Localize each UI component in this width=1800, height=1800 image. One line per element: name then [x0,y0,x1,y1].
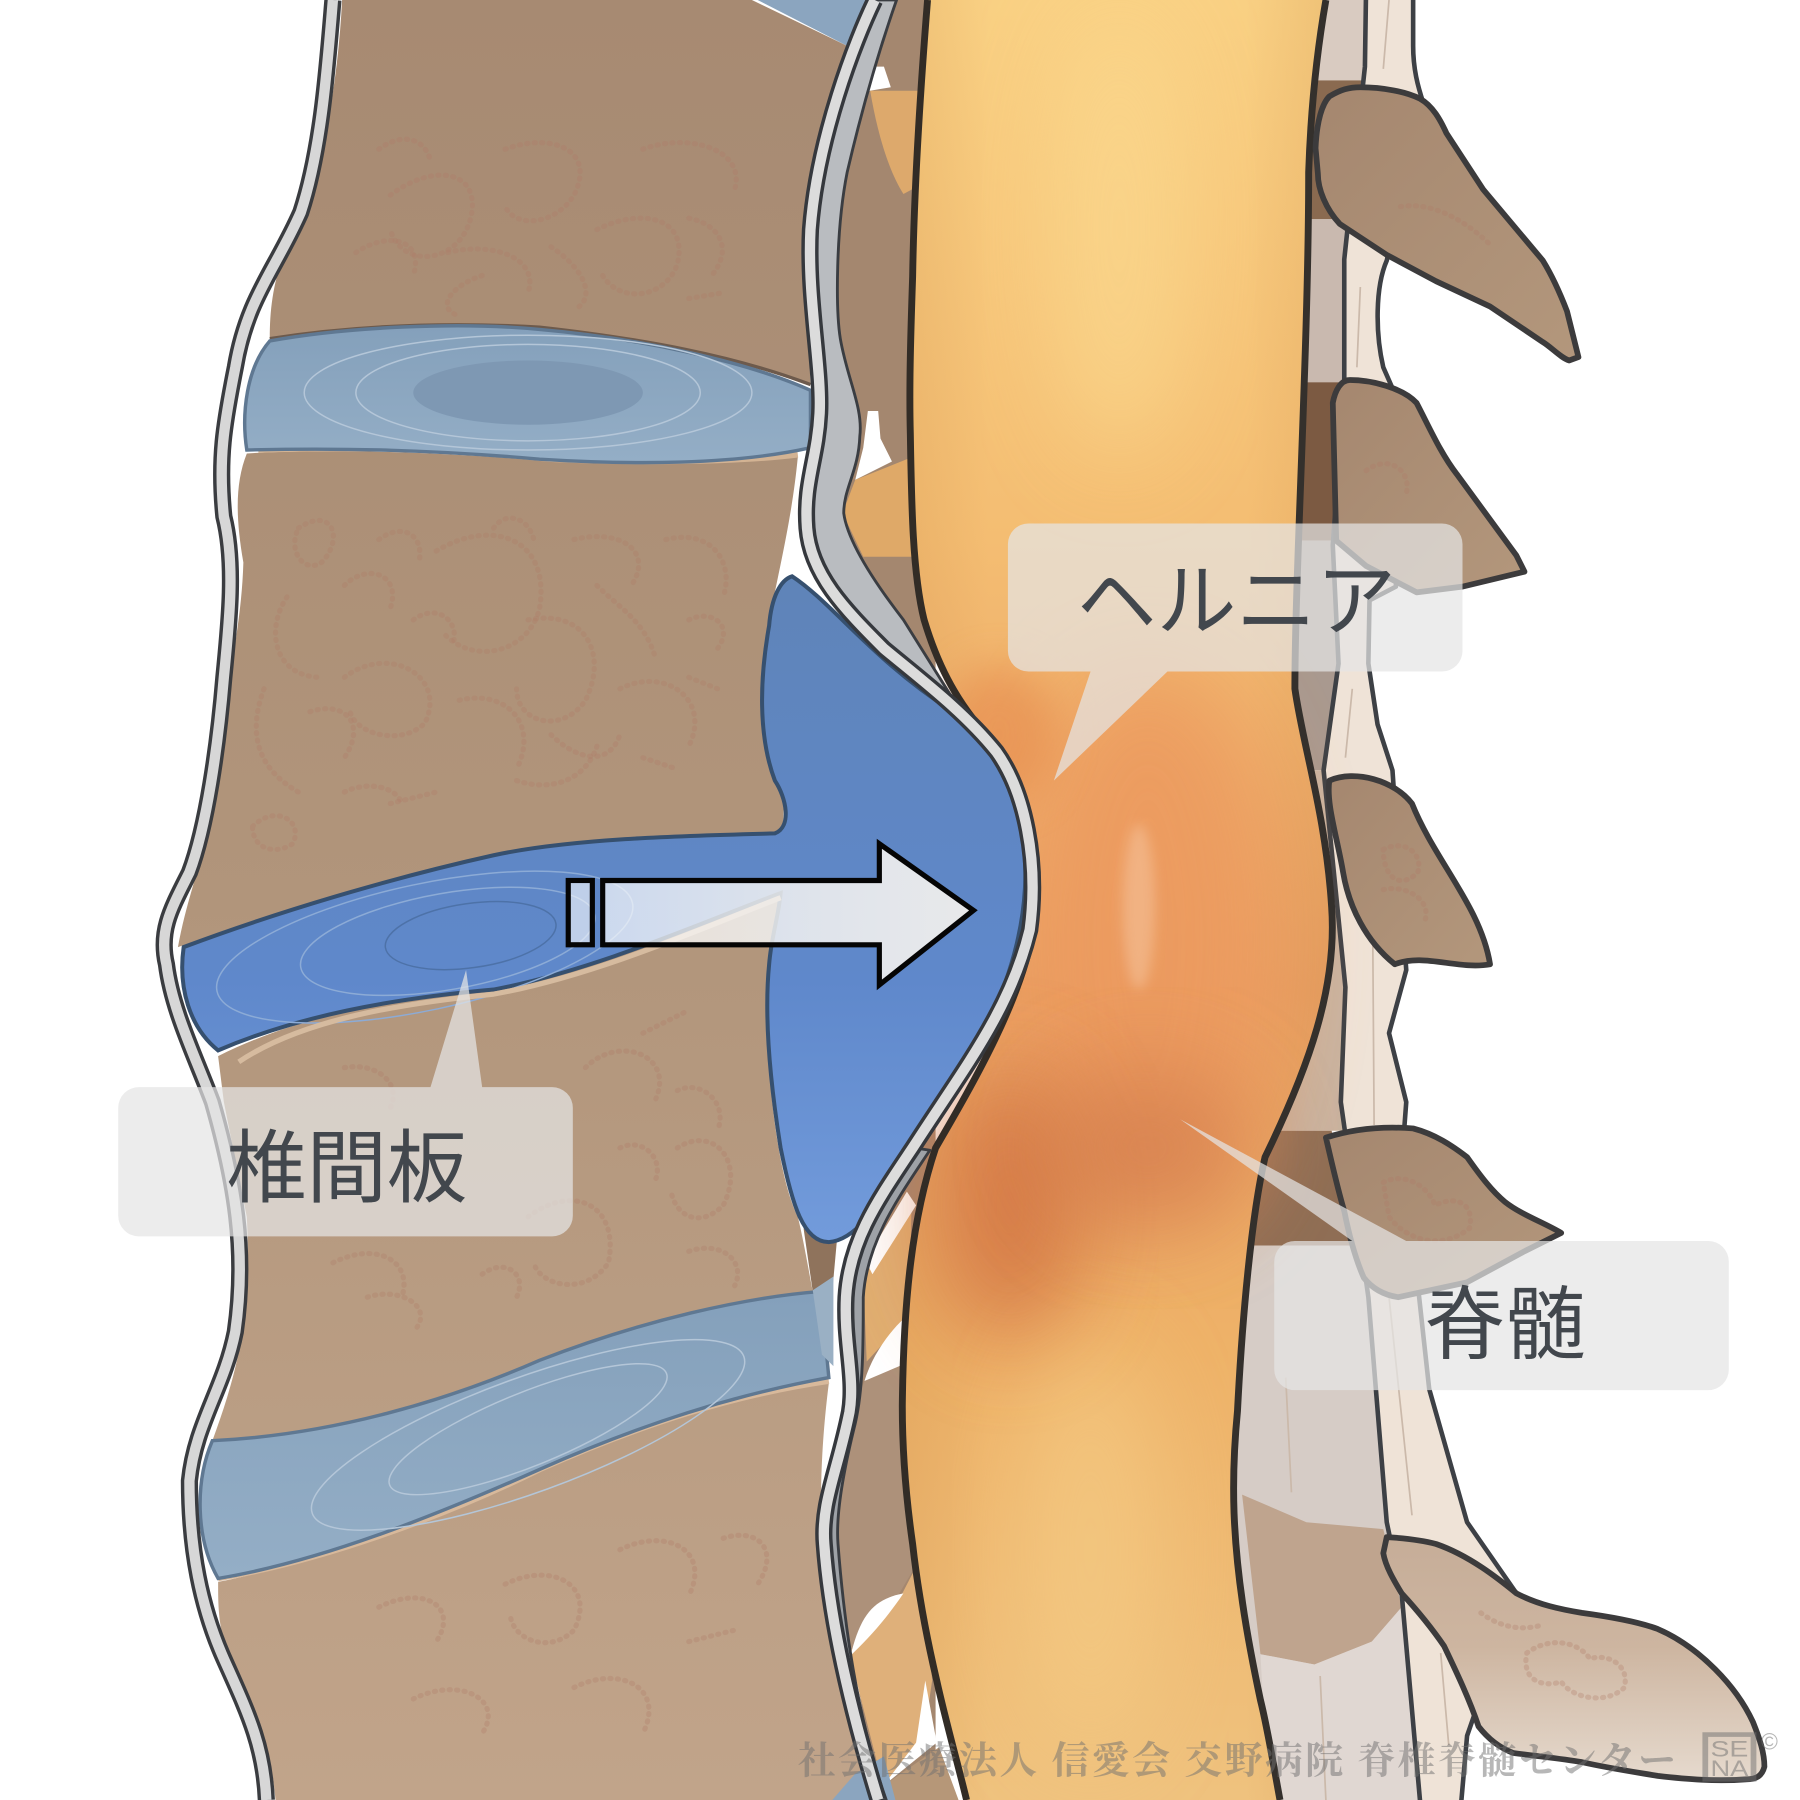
callout: spinal cord: 脊髄 [1425,1280,1585,1370]
callout: herniation [1008,523,1462,781]
callout: herniation: ヘルニア [1077,557,1396,647]
posterior longitudinal ligament [806,0,1033,1800]
vertebral bodies [178,0,884,1800]
logo: SENA mark [1702,1728,1778,1782]
watermark: hospital name: 社会医療法人 信愛会 交野病院 脊椎脊髄センター [798,1741,1676,1783]
anterior ligament [164,0,333,1800]
spinous processes [1316,87,1764,1780]
logo: SENA mark: SE [1710,1736,1748,1761]
logo: SENA mark: NA [1710,1756,1749,1781]
intervertebral discs [200,0,895,1800]
callout: intervertebral disc: 椎間板 [226,1124,467,1214]
arrow: direction of herniation [568,844,973,985]
bone texture [253,139,767,1733]
herniated disc [182,576,1025,1242]
process texture [1366,206,1625,1698]
logo: SENA mark: © [1761,1728,1778,1754]
callout: spinal cord [1180,1119,1729,1390]
callout: intervertebral disc [118,970,573,1236]
epidural tissue behind the ligament [804,0,959,1800]
spinal cord [902,0,1332,1800]
posterior ligament and lamina column [1217,0,1516,1800]
